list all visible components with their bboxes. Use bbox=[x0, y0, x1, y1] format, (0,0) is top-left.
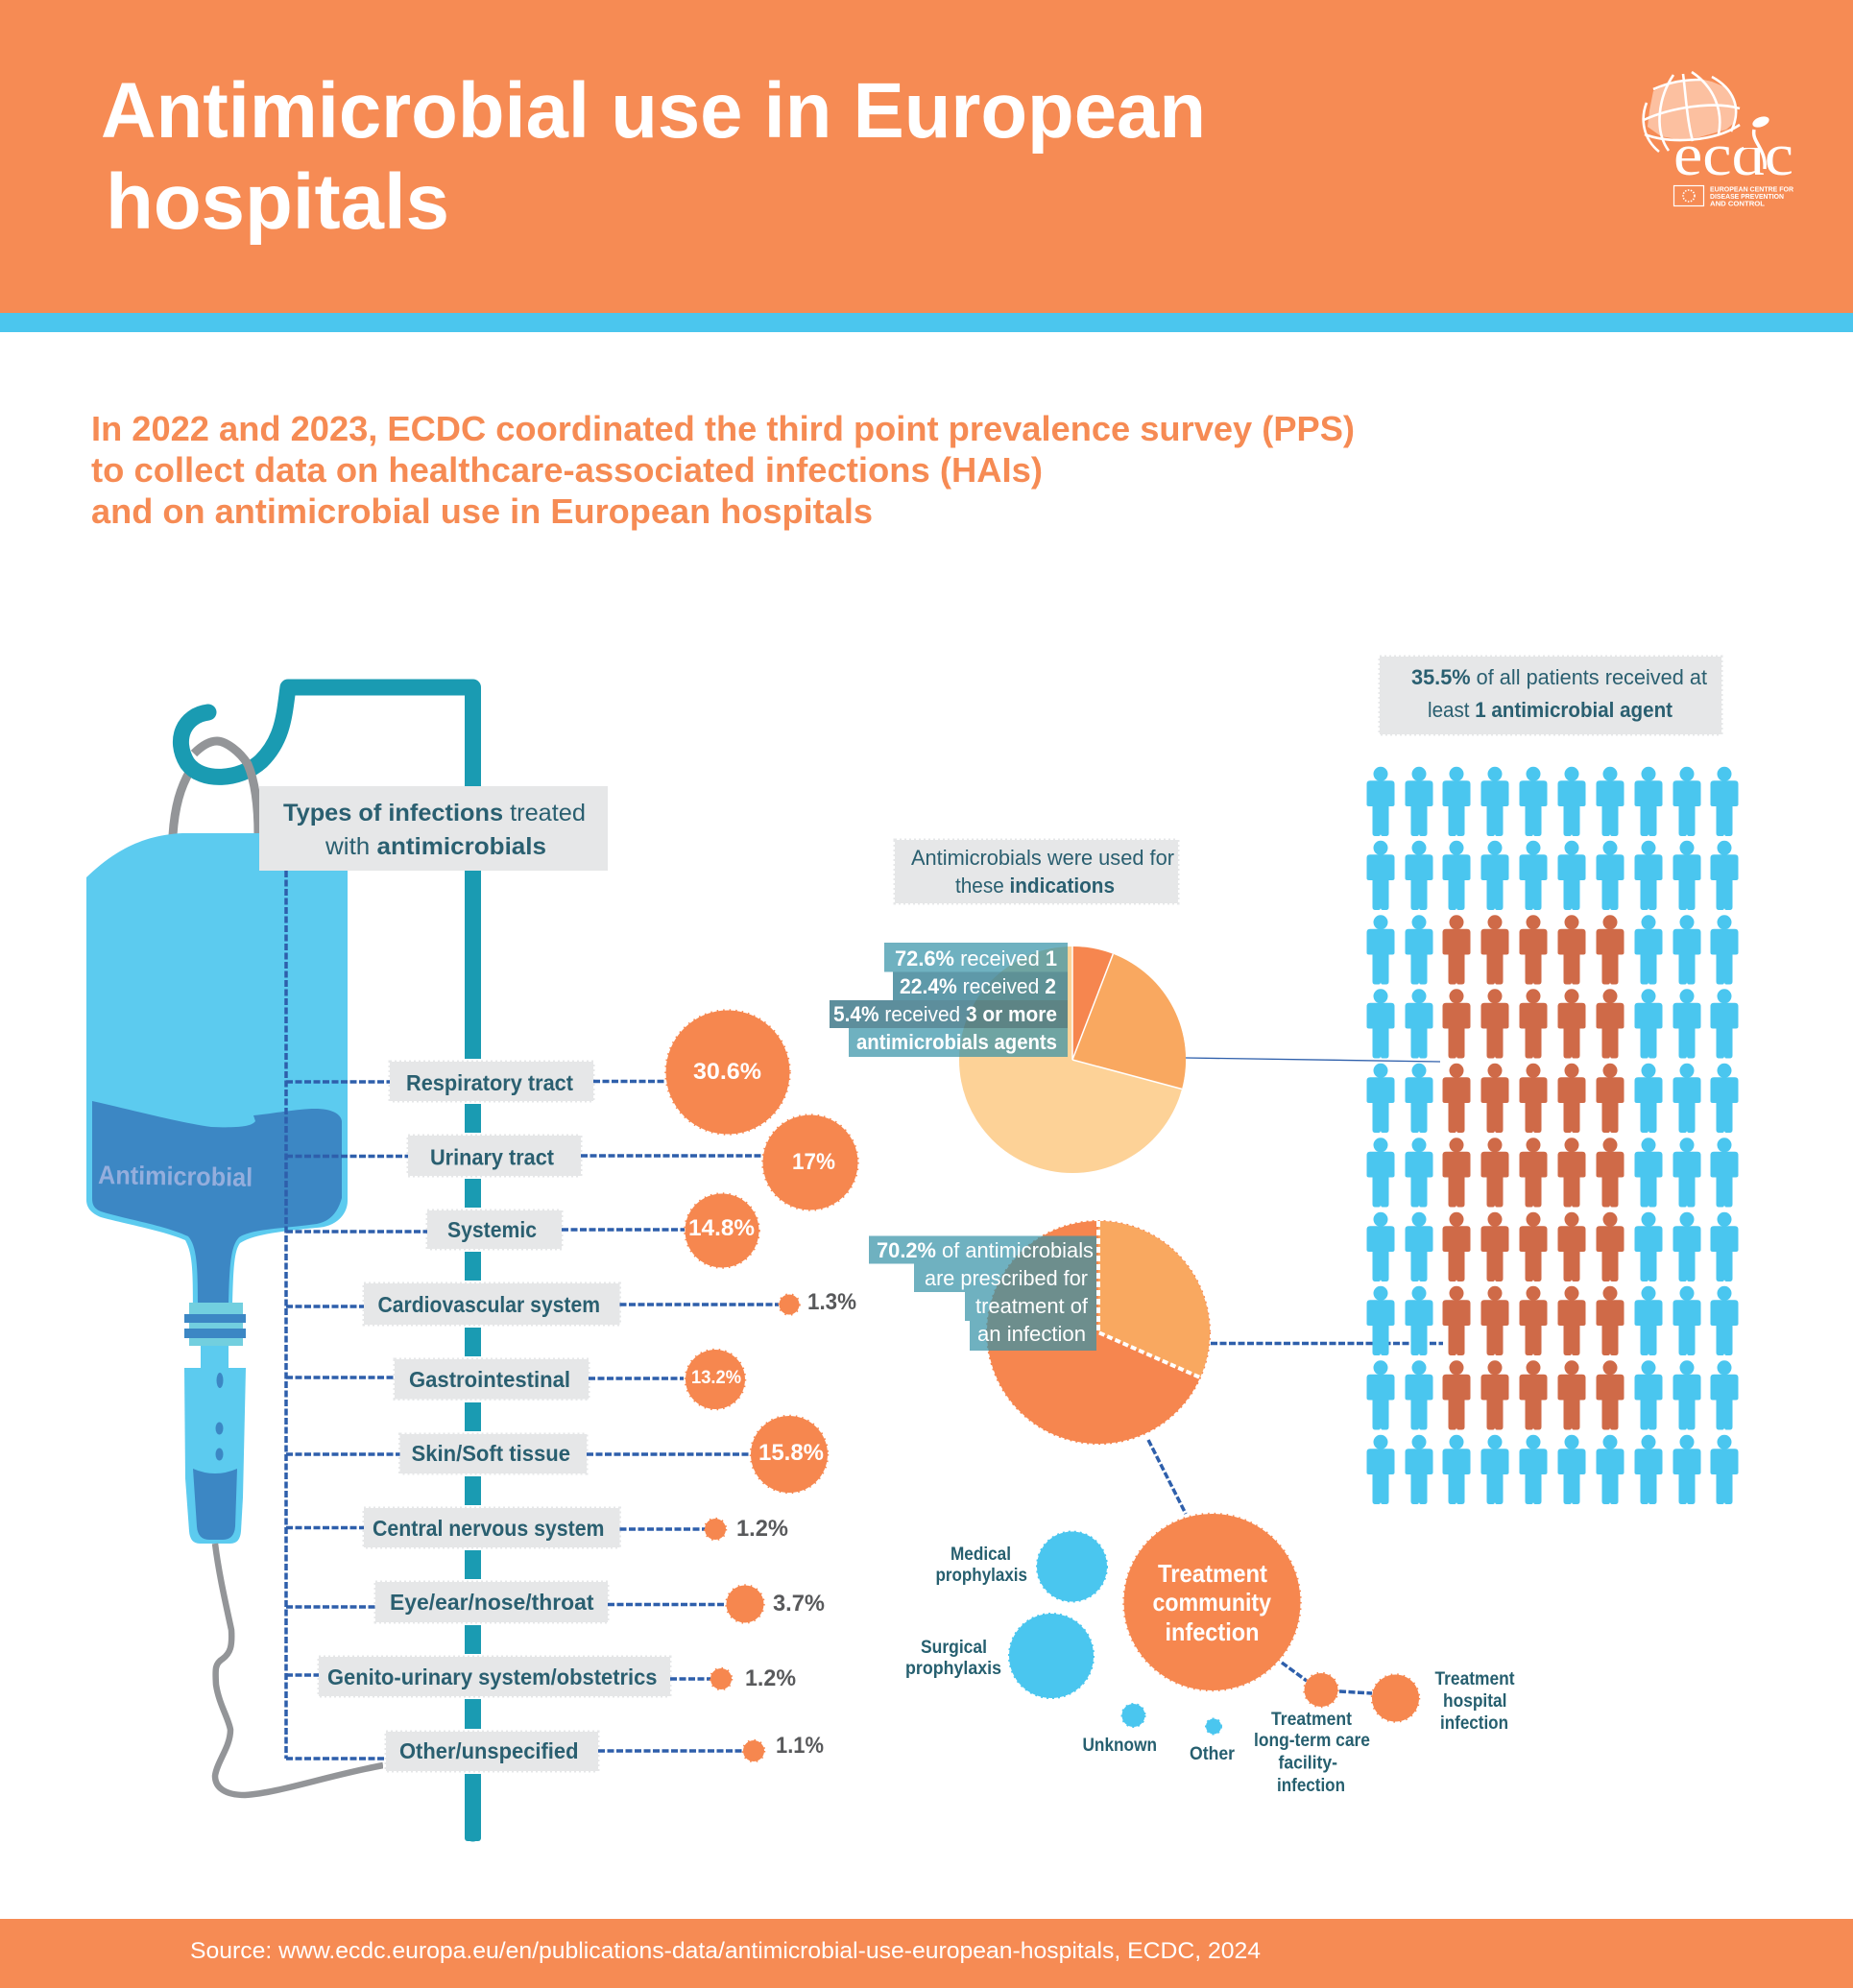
row: Urinary tract: Urinary tract bbox=[430, 1144, 554, 1169]
heading: 35.5% of all patients: least 1 antimicrobial agent bbox=[1428, 698, 1673, 722]
row: Respiratory tract bbox=[286, 1010, 789, 1135]
bubble: treatment community infection bbox=[1123, 1514, 1300, 1690]
row: Cardiovascular system: Cardiovascular system bbox=[378, 1292, 600, 1317]
callout: 70.2% bbox=[869, 1236, 1096, 1351]
connector: pie 1 to people bbox=[1186, 1058, 1440, 1062]
row: Respiratory tract: Respiratory tract bbox=[406, 1070, 573, 1095]
people grid: 100 patients, 35 highlighted bbox=[1367, 767, 1738, 1504]
bubble: unknown bbox=[1083, 1704, 1157, 1756]
title: Antimicrobial use in European bbox=[101, 67, 1206, 155]
header blue stripe bbox=[0, 313, 1853, 332]
connector: pie 2 to people bbox=[1211, 1342, 1443, 1345]
row: Central nervous system: 1.2% bbox=[736, 1516, 788, 1542]
row: Eye/ear/nose/throat: Eye/ear/nose/throat bbox=[390, 1590, 594, 1615]
row: Other/unspecified bbox=[286, 1729, 824, 1774]
bubble: treatment community infection: Treatment bbox=[1158, 1559, 1267, 1588]
bubble: treatment long-term care facility infection: infection bbox=[1277, 1776, 1345, 1796]
callout: 70.2%: are prescribed for bbox=[925, 1266, 1088, 1290]
row: Urinary tract bbox=[286, 1115, 858, 1210]
IV bag hanging loop, left part bbox=[173, 771, 190, 835]
bubble: treatment hospital infection: infection bbox=[1440, 1713, 1508, 1734]
row: Gastrointestinal: Gastrointestinal bbox=[409, 1367, 570, 1392]
logo: ECDC: DISEASE PREVENTION bbox=[1710, 192, 1784, 201]
callout: 70.2%: 70.2% of antimicrobials bbox=[877, 1238, 1094, 1262]
pie chart: treatment of infection bbox=[987, 1221, 1210, 1444]
intro text: and on antimicrobial use in European hospitals bbox=[91, 491, 873, 531]
heading: 35.5% of all patients: 35.5% of all patients received at bbox=[1411, 665, 1707, 689]
row: Genito-urinary system/obstetrics: Genito-urinary system/obstetrics bbox=[327, 1665, 657, 1689]
logo: ECDC bbox=[1644, 72, 1794, 207]
footer bbox=[0, 1919, 1853, 1988]
bubble: other bbox=[1190, 1718, 1236, 1764]
footer: Source: www.ecdc.europa.eu/en/publications-data/antimicrobial-use-european-hospitals, ECDC, 2024 bbox=[190, 1938, 1261, 1964]
bubble: unknown: Unknown bbox=[1083, 1736, 1157, 1756]
IV bag bbox=[86, 833, 348, 1305]
heading: indications: these indications bbox=[955, 874, 1115, 898]
intro text: to collect data on healthcare-associated infections (HAIs) bbox=[91, 450, 1043, 490]
row: Central nervous system: Central nervous system bbox=[373, 1516, 605, 1541]
callout: agents received: 22.4% received 2 bbox=[900, 974, 1056, 998]
heading: indications bbox=[895, 840, 1178, 903]
intro text bbox=[91, 409, 1355, 531]
row: Cardiovascular system bbox=[286, 1281, 856, 1328]
bag fluid bbox=[92, 1101, 342, 1304]
bubble: medical prophylaxis: prophylaxis bbox=[935, 1566, 1027, 1586]
bubble: surgical prophylaxis bbox=[905, 1614, 1094, 1698]
bubble: treatment long-term care facility infection: long-term care bbox=[1254, 1731, 1370, 1751]
title bbox=[101, 67, 1206, 246]
IV bag hanging loop, right part bbox=[194, 741, 258, 835]
row: Other/unspecified: Other/unspecified bbox=[399, 1738, 578, 1763]
bubble: treatment hospital infection: hospital bbox=[1443, 1691, 1507, 1712]
bubble: treatment community infection: infection bbox=[1166, 1617, 1260, 1646]
row: Gastrointestinal bbox=[286, 1350, 745, 1409]
row: Central nervous system bbox=[286, 1505, 788, 1550]
callout: 70.2%: an infection bbox=[977, 1322, 1086, 1346]
bubble: treatment long-term care facility infection: Treatment bbox=[1271, 1710, 1353, 1730]
callout: agents received bbox=[830, 943, 1068, 1057]
heading: indications: Antimicrobials were used for bbox=[911, 846, 1174, 870]
heading: types of infections: Types of infections treated bbox=[283, 800, 586, 826]
bubble: treatment hospital infection bbox=[1372, 1669, 1515, 1734]
bag connector and drip chamber bbox=[184, 1303, 246, 1544]
bag label: Antimicrobial bbox=[98, 1161, 253, 1192]
bubble: other: Other bbox=[1190, 1744, 1236, 1764]
logo: ECDC: EUROPEAN CENTRE FOR bbox=[1710, 184, 1794, 194]
row: Other/unspecified: 1.1% bbox=[776, 1733, 824, 1759]
row: Respiratory tract: 30.6% bbox=[693, 1059, 761, 1085]
heading: types of infections bbox=[259, 786, 608, 871]
row: Skin/Soft tissue bbox=[286, 1416, 828, 1493]
row: Genito-urinary system/obstetrics bbox=[286, 1654, 796, 1699]
bubble: medical prophylaxis: Medical bbox=[951, 1545, 1011, 1565]
bubble: medical prophylaxis bbox=[935, 1532, 1107, 1601]
header band bbox=[0, 0, 1853, 313]
bubble: surgical prophylaxis: prophylaxis bbox=[905, 1659, 1001, 1679]
row: Urinary tract: 17% bbox=[792, 1149, 835, 1175]
row: Skin/Soft tissue: 15.8% bbox=[758, 1440, 824, 1466]
row: Systemic: Systemic bbox=[447, 1217, 537, 1242]
bubble: treatment hospital infection: Treatment bbox=[1434, 1669, 1515, 1689]
row: Systemic: 14.8% bbox=[688, 1215, 755, 1241]
IV tube bbox=[215, 1544, 383, 1795]
row: Skin/Soft tissue: Skin/Soft tissue bbox=[411, 1441, 570, 1466]
row: Eye/ear/nose/throat: 3.7% bbox=[773, 1591, 825, 1617]
title: hospitals bbox=[106, 158, 449, 246]
row: Gastrointestinal: 13.2% bbox=[691, 1368, 741, 1388]
bubble: treatment long-term care facility infection bbox=[1254, 1673, 1370, 1796]
row: Genito-urinary system/obstetrics: 1.2% bbox=[745, 1665, 796, 1691]
heading: types of infections: with antimicrobials bbox=[325, 833, 546, 860]
heading: 35.5% of all patients bbox=[1380, 657, 1721, 734]
bubble: treatment long-term care facility infection: facility- bbox=[1279, 1753, 1337, 1774]
callout: 70.2%: treatment of bbox=[975, 1294, 1089, 1318]
connector: community to long-term care and hospital bbox=[1282, 1663, 1372, 1693]
callout: agents received: 72.6% received 1 bbox=[895, 946, 1057, 970]
logo: ECDC: ecdc bbox=[1673, 123, 1793, 188]
callout: agents received: 5.4% received 3 or more bbox=[833, 1002, 1057, 1026]
bubble: surgical prophylaxis: Surgical bbox=[921, 1638, 987, 1658]
logo: ECDC: AND CONTROL bbox=[1710, 200, 1765, 207]
intro text: In 2022 and 2023, ECDC coordinated the third point prevalence survey (PPS) bbox=[91, 409, 1355, 448]
row: Systemic bbox=[286, 1194, 758, 1267]
bubble: treatment community infection: community bbox=[1152, 1588, 1271, 1617]
IV stand pole and hook bbox=[180, 687, 481, 1841]
callout: agents received: antimicrobials agents bbox=[856, 1030, 1057, 1054]
main dashed connector bbox=[284, 871, 288, 1759]
row: Cardiovascular system: 1.3% bbox=[807, 1289, 856, 1315]
connector: pie 2 to treatment community infection bbox=[1148, 1440, 1186, 1514]
pie chart: number of agents received bbox=[959, 946, 1186, 1173]
row: Eye/ear/nose/throat bbox=[286, 1579, 825, 1625]
